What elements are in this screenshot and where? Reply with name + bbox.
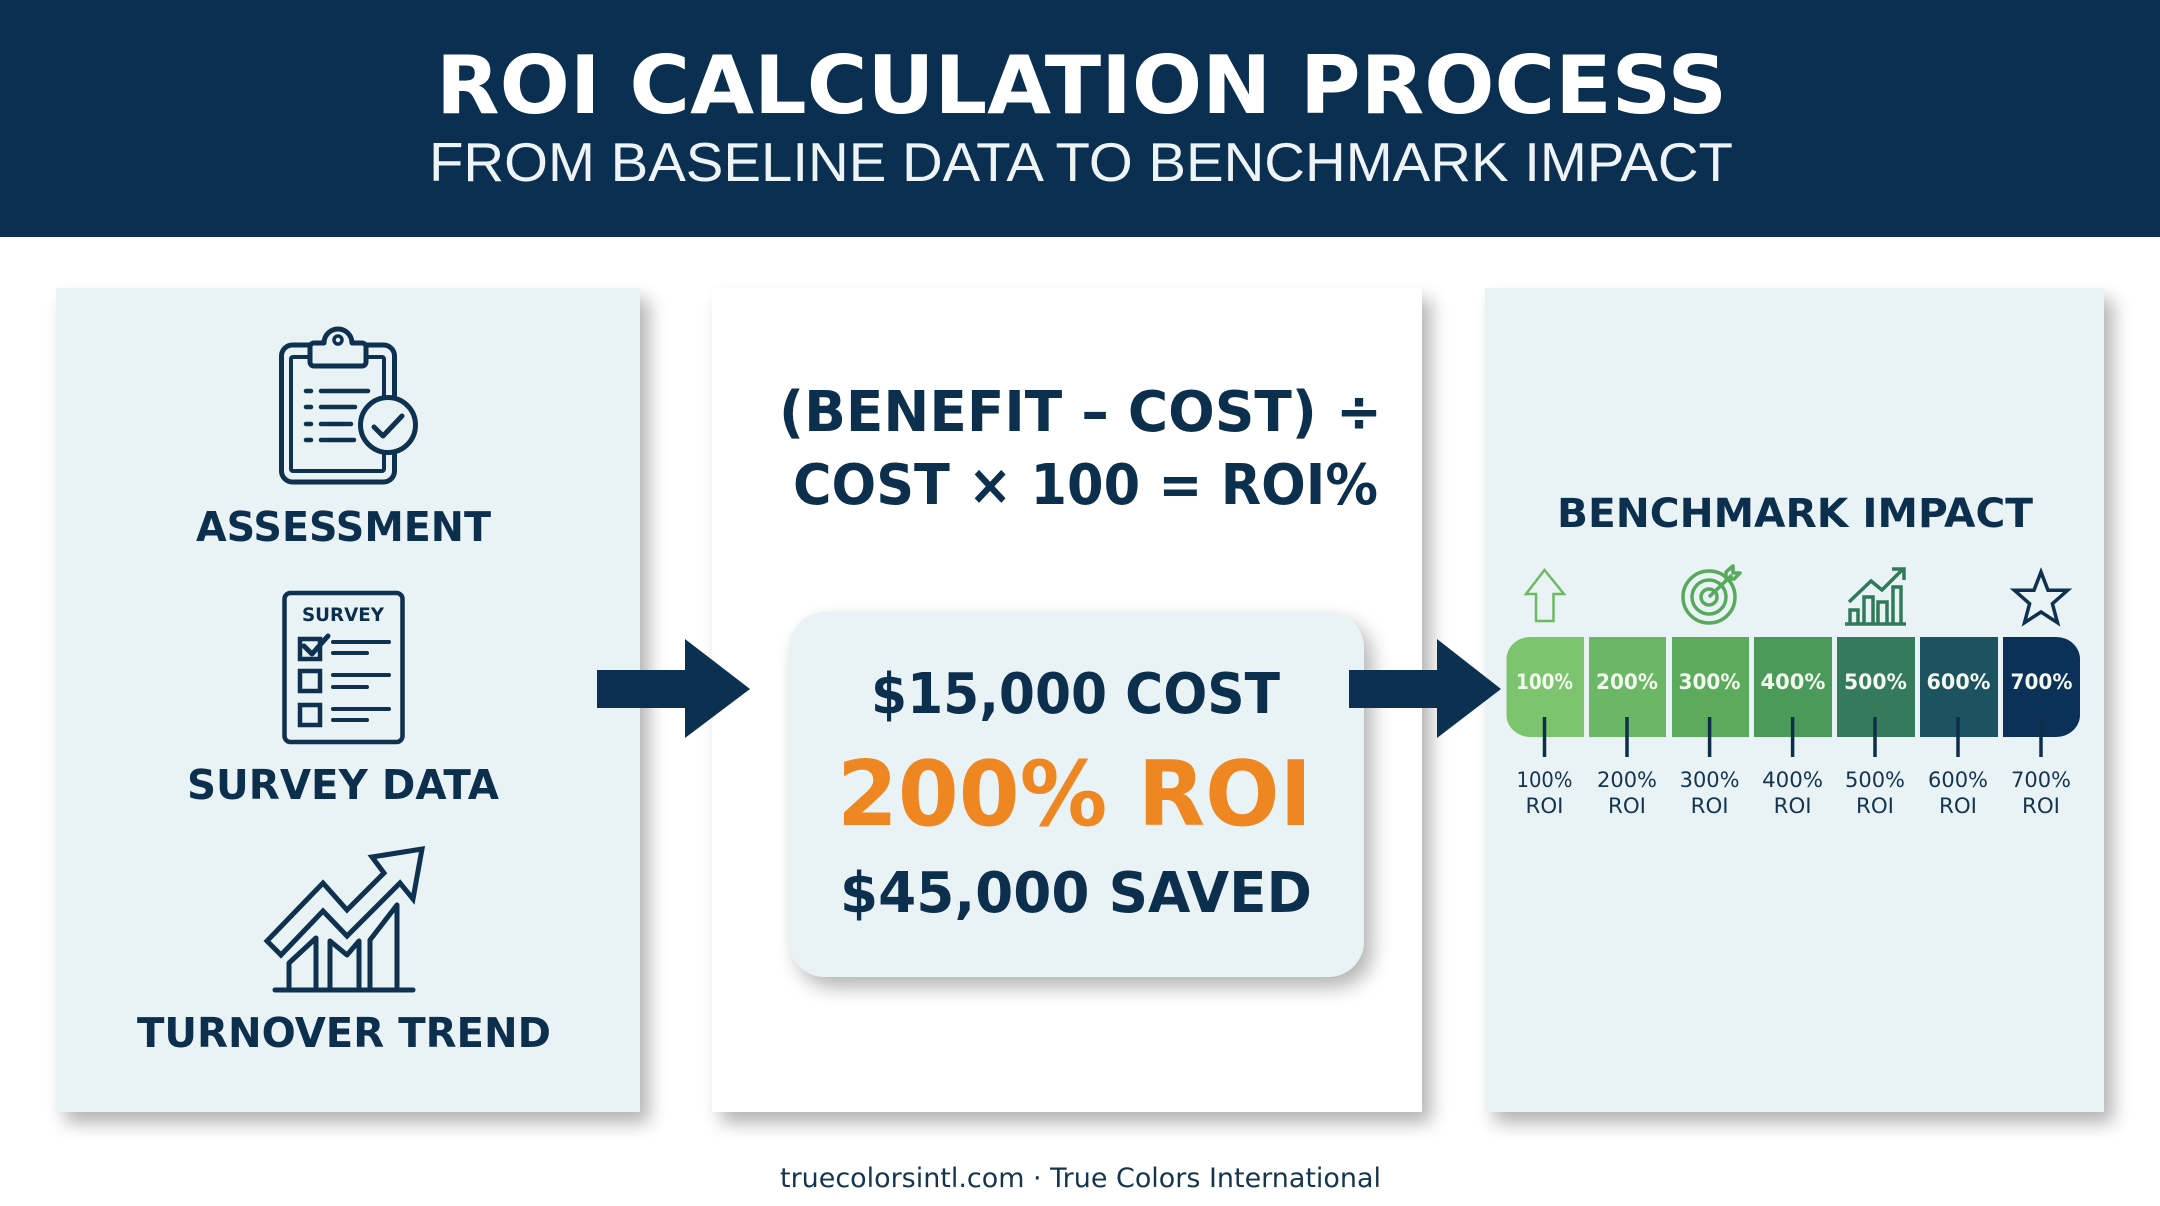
formula: COST × 100 = ROI% (793, 453, 1378, 518)
scale percentages: 400% (1760, 670, 1826, 694)
subtitle: FROM BASELINE DATA TO BENCHMARK IMPACT (429, 131, 1733, 193)
footer source line: truecolorsintl.com · True Colors International (780, 1163, 1381, 1194)
label: turnover trend: TURNOVER TREND (137, 1009, 551, 1057)
scale labels: ROI (2022, 794, 2060, 818)
scale percentages: 600% (1926, 670, 1990, 694)
panel: inputs (56, 288, 640, 1112)
label: assessment: ASSESSMENT (196, 503, 491, 551)
scale labels: ROI (1526, 794, 1564, 818)
formula (779, 380, 1382, 518)
icon: survey form: SURVEY (302, 604, 384, 626)
icon: survey form (284, 593, 402, 742)
header banner (0, 0, 2160, 237)
scale labels: 500% (1845, 768, 1905, 792)
scale percentages: 500% (1844, 670, 1907, 694)
scale percentages: 300% (1678, 670, 1740, 694)
icon: up arrow (1526, 570, 1564, 621)
scale labels: 600% (1928, 768, 1988, 792)
scale labels: ROI (1691, 794, 1729, 818)
icon: turnover trend chart (267, 849, 422, 990)
scale labels: 100% (1516, 768, 1572, 792)
panel: calculation (712, 288, 1422, 1112)
scale percentages (1516, 670, 2072, 694)
scale labels (1516, 768, 2071, 818)
scale labels: 400% (1762, 768, 1823, 792)
icon: clipboard with check (282, 329, 416, 482)
cost figure: $15,000 COST (871, 662, 1280, 727)
arrow: calculation to benchmark (1349, 639, 1501, 738)
scale percentages: 700% (2010, 670, 2072, 694)
roi scale bar (1506, 637, 2081, 737)
roi figure: 200% ROI (837, 742, 1312, 847)
scale labels: ROI (1856, 794, 1894, 818)
title: ROI CALCULATION PROCESS (436, 39, 1727, 132)
formula: (BENEFIT – COST) ÷ (779, 380, 1382, 445)
panel: benchmark impact (1485, 288, 2104, 1112)
scale labels: ROI (1608, 794, 1646, 818)
scale percentages: 100% (1516, 670, 1573, 694)
scale tick marks (1544, 717, 2041, 757)
scale labels: ROI (1939, 794, 1977, 818)
scale labels: ROI (1774, 794, 1812, 818)
arrow: inputs to calculation (597, 639, 750, 738)
icon: star (2014, 572, 2068, 623)
heading: BENCHMARK IMPACT (1557, 491, 2034, 537)
result card (789, 612, 1364, 977)
label: survey data: SURVEY DATA (187, 761, 499, 809)
scale percentages: 200% (1596, 670, 1658, 694)
icon: growth chart (1845, 569, 1906, 624)
scale labels: 200% (1597, 768, 1657, 792)
icon: target (1683, 566, 1740, 623)
scale labels: 700% (2011, 768, 2071, 792)
savings figure: $45,000 SAVED (840, 861, 1312, 926)
scale labels: 300% (1680, 768, 1740, 792)
